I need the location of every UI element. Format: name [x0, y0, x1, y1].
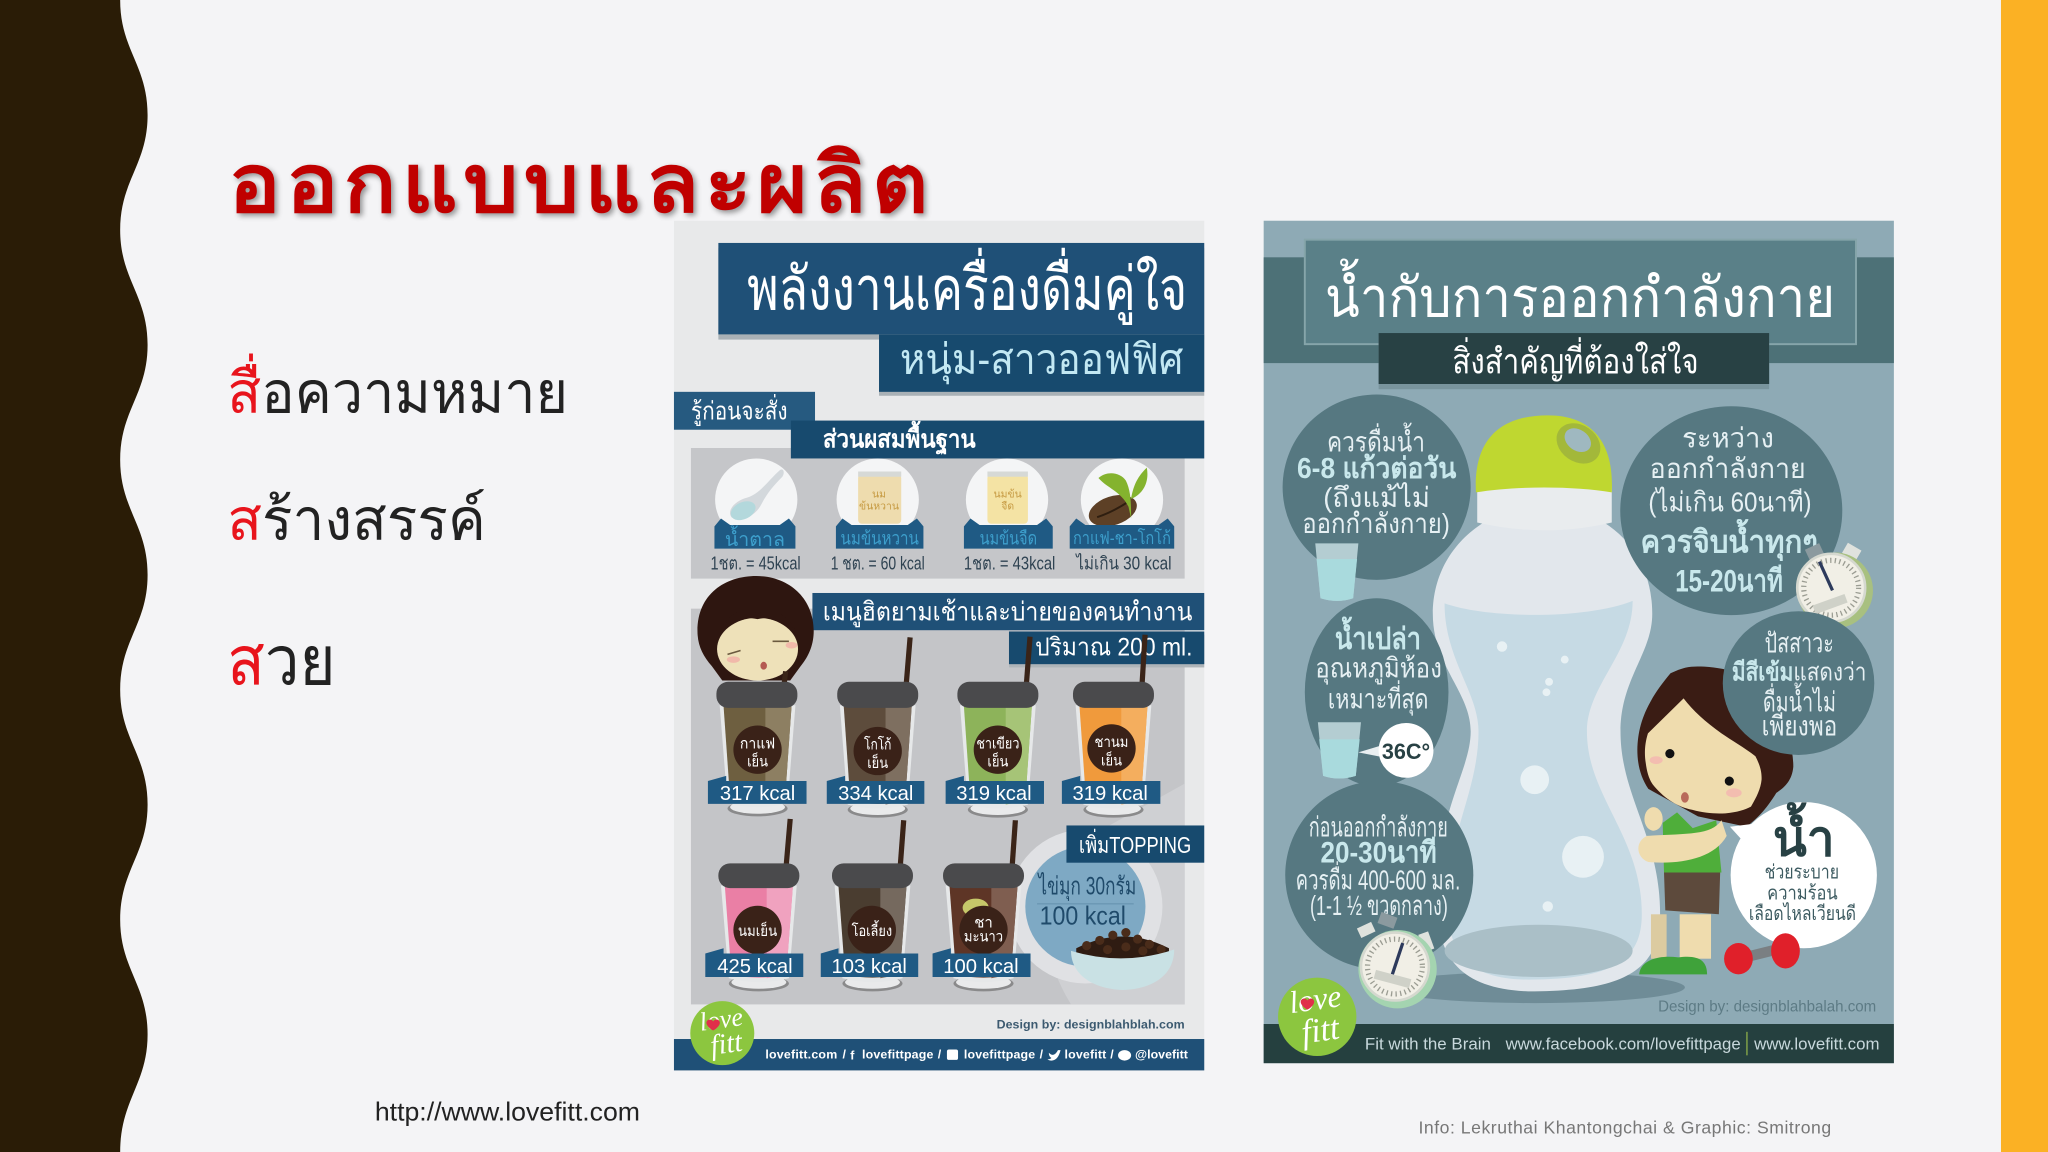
heading ribbon: น้ำกับการออกกำลังกาย [1325, 259, 1835, 329]
logo: lovefitt: fitt [1299, 1009, 1343, 1052]
cup: iced coffee [708, 671, 807, 816]
credit: designer: Design by: designblahblah.com [997, 1017, 1185, 1031]
banner: base ingredients: ส่วนผสมพื้นฐาน [823, 420, 976, 455]
cup: iced black coffee: 103 kcal [832, 956, 907, 978]
ingredient: evaporated milk: นมข้น [994, 489, 1022, 501]
logo: lovefitt: love [1287, 978, 1343, 1020]
callout: water benefits: ช่วยระบาย [1765, 862, 1839, 884]
cup: iced lemon tea: 100 kcal [943, 956, 1019, 978]
cup: iced black coffee: โอเลี้ยง [852, 920, 892, 940]
icon: stopwatch 15 minutes [1797, 543, 1873, 628]
icon: bowl of tapioca pearls [1071, 928, 1174, 990]
cup: iced lemon tea: มะนาว [964, 929, 1003, 946]
footer bar with links: www.facebook.com/lovefittpage [1505, 1034, 1741, 1053]
cup: iced green tea [946, 637, 1044, 818]
callout: water benefits: เลือดไหลเวียนดี [1749, 902, 1856, 925]
footer bar with social links: f [850, 1048, 855, 1062]
panel: popular menu background [691, 609, 1185, 1004]
callout: topping pearl calories [1008, 825, 1204, 990]
cup: iced green tea: เย็น [987, 752, 1008, 771]
bubble: room temperature water [1305, 598, 1448, 786]
banner: add topping [1066, 825, 1204, 863]
subheading banner: หนุ่ม-สาวออฟฟิศ [900, 336, 1184, 385]
footer bar with social links: @lovefitt [1135, 1047, 1188, 1061]
callout: water benefits: น้ำ [1773, 802, 1835, 867]
title: ออกแบบและผลิต [229, 140, 934, 230]
cup: iced milk [705, 819, 803, 991]
icon: stopwatch 30 minutes [1357, 912, 1437, 1008]
bubble: drink 6-8 glasses [1283, 394, 1471, 601]
bottle cap [1476, 415, 1612, 492]
banner: know before ordering [674, 392, 815, 430]
bubble: dark urine: มีสีเข้มแสดงว่า [1732, 658, 1866, 686]
banner: know before ordering: รู้ก่อนจะสั่ง [691, 393, 788, 426]
cup: iced lemon tea [933, 820, 1031, 991]
cup: iced coffee: 317 kcal [720, 783, 795, 805]
callout: topping pearl calories: ไข่มุก 30กรัม [1037, 872, 1136, 902]
logo: lovefitt [1278, 978, 1356, 1056]
ingredient: evaporated milk [964, 458, 1055, 573]
panel: base ingredients background [691, 448, 1185, 579]
bubble: during exercise: 15-20นาที [1675, 564, 1783, 599]
subheading box: สิ่งสำคัญที่ต้องใส่ใจ [1452, 337, 1699, 381]
bubble: during exercise: ควรจิบน้ำทุกๆ [1640, 518, 1818, 561]
footer bar with social links [674, 1039, 1204, 1070]
cup: iced milk tea: เย็น [1101, 750, 1122, 769]
cup: iced cocoa [827, 637, 924, 818]
bubble: dark urine: เพียงพอ [1762, 710, 1837, 741]
cup: iced black coffee [821, 820, 918, 991]
ingredient: sweetened condensed milk: นม [872, 490, 886, 501]
orange right bar [2001, 0, 2048, 1152]
word: create: สร้างสรรค์ [227, 488, 486, 552]
footer bar with social links: lovefitt.com [765, 1047, 837, 1061]
banner: about 200 ml [1009, 632, 1204, 667]
icon: glass with 36C label: 36C° [1382, 739, 1430, 764]
icon: glass with 36C label [1318, 722, 1433, 778]
text block: three s-words [227, 354, 568, 699]
banner: about 200 ml: ปริมาณ 200 ml. [1035, 635, 1192, 662]
bubble: dark urine: ปัสสาวะ [1765, 628, 1834, 659]
cup: iced coffee: กาแฟ [740, 735, 775, 752]
cup: iced milk: 425 kcal [717, 956, 793, 978]
ingredient: evaporated milk: จืด [1001, 499, 1014, 512]
footer bar with social links: lovefitt [1064, 1047, 1106, 1061]
ingredient: evaporated milk: 1ชต. = 43kcal [964, 552, 1055, 573]
bubble: drink 6-8 glasses: (ถึงแม้ไม่ [1323, 482, 1430, 513]
footer bar with social links: / [1040, 1047, 1044, 1061]
credit line: Info: Lekruthai Khantongchai & Graphic: Smitrong [1418, 1118, 1831, 1138]
ingredient: coffee tea cocoa [1070, 458, 1174, 573]
ingredient: sweetened condensed milk: นมข้นหวาน [840, 528, 919, 549]
cup: iced milk: นมเย็น [738, 921, 777, 940]
callout: water benefits [1730, 802, 1877, 948]
logo: lovefitt: love [698, 1002, 745, 1037]
banner: add topping: เพิ่มTOPPING [1079, 828, 1191, 858]
heading banner [718, 243, 1204, 340]
character: sleepy office worker head [697, 576, 814, 680]
bubble: during exercise: ระหว่าง [1682, 422, 1774, 453]
subheading box [1379, 333, 1769, 389]
cup: iced green tea: ชาเขียว [976, 735, 1019, 752]
bubble: before exercise [1285, 781, 1473, 969]
callout: water benefits: ความร้อน [1767, 882, 1838, 904]
bubble: dark urine [1723, 611, 1874, 755]
bottle neck [1477, 486, 1612, 530]
bubble: room temperature water: น้ำเปล่า [1335, 616, 1421, 656]
credit: designer: Design by: designblahbalah.com [1658, 999, 1876, 1016]
footer bar with links [1264, 1024, 1894, 1063]
cup: iced milk tea: 319 kcal [1073, 783, 1148, 805]
banner: popular morning and afternoon menu: เมนูฮิตยามเช้าและบ่ายของคนทำงาน [823, 596, 1193, 627]
bubble: drink 6-8 glasses: ออกกำลังกาย) [1302, 508, 1450, 539]
ingredient: coffee tea cocoa: กาแฟ-ชา-โกโก้ [1073, 528, 1171, 548]
ingredient: sweetened condensed milk: 1 ชต. = 60 kcal [831, 552, 925, 573]
cup: iced cocoa: 334 kcal [838, 783, 913, 805]
heading ribbon [1264, 240, 1894, 363]
word: communicate: สื่อความหมาย [227, 354, 568, 426]
ingredient: sweetened condensed milk [831, 458, 925, 573]
cup: iced cocoa: เย็น [867, 753, 888, 772]
footer bar with links: www.lovefitt.com [1753, 1034, 1880, 1053]
logo: lovefitt: fitt [708, 1026, 745, 1062]
ingredient: evaporated milk: นมข้นจืด [980, 528, 1037, 549]
banner: base ingredients [791, 420, 1204, 458]
icon: red dumbbell [1724, 933, 1800, 974]
footer bar with links: Fit with the Brain [1365, 1035, 1491, 1053]
callout: topping pearl calories: 100 kcal [1040, 901, 1126, 931]
bubble: during exercise: (ไม่เกิน 60นาที) [1648, 487, 1812, 518]
bubble: dark urine: ดื่มน้ำไม่ [1763, 683, 1836, 718]
cup: iced coffee: เย็น [747, 752, 768, 771]
bubble: room temperature water: อุณหภูมิห้อง [1315, 652, 1442, 685]
ingredient: sugar: น้ำตาล [725, 525, 785, 551]
word: beautiful: สวย [227, 624, 336, 699]
footer bar with social links: / [938, 1047, 942, 1061]
footer bar with social links: lovefittpage [862, 1047, 933, 1061]
footer bar with social links: lovefittpage [964, 1047, 1035, 1061]
cup: iced green tea: 319 kcal [956, 783, 1032, 805]
footer bar with social links: / [842, 1047, 846, 1061]
bubble: before exercise: ควรดื่ม 400-600 มล. [1296, 861, 1460, 895]
ingredient: sweetened condensed milk: ข้นหวาน [859, 500, 899, 512]
cup: iced lemon tea: ชา [974, 914, 993, 931]
bubble: drink 6-8 glasses: ควรดื่มน้ำ [1327, 423, 1425, 458]
icon: glass of water [1315, 543, 1358, 601]
footer bar with social links: / [1110, 1047, 1114, 1061]
bubble: before exercise: ก่อนออกกำลังกาย [1309, 812, 1448, 843]
bubble: drink 6-8 glasses: 6-8 แก้วต่อวัน [1297, 453, 1457, 485]
wavy dark left border [0, 0, 148, 1152]
cup: iced cocoa: โกโก้ [864, 736, 891, 754]
heading banner: พลังงานเครื่องดื่มคู่ใจ [747, 248, 1187, 326]
cup: iced milk tea [1062, 635, 1160, 818]
source url: http://www.lovefitt.com [375, 1097, 640, 1127]
bubble: during exercise: ออกกำลังกาย [1650, 453, 1806, 484]
bubble: room temperature water: เหมาะที่สุด [1328, 680, 1429, 716]
logo: lovefitt [690, 1001, 754, 1065]
panel: water and exercise infographic [1264, 221, 1894, 1063]
cup: iced milk tea: ชานม [1095, 734, 1128, 751]
bubble: before exercise: (1-1 ½ ขวดกลาง) [1310, 890, 1448, 921]
bubble: during exercise [1620, 406, 1842, 615]
ingredient: sugar: 1ชต. = 45kcal [711, 552, 801, 573]
ingredient: sugar [711, 458, 801, 573]
bubble: before exercise: 20-30นาที [1320, 837, 1437, 870]
character: girl hugging bottle [1637, 666, 1793, 974]
panel: energy drinks infographic [674, 221, 1204, 1071]
ingredient: coffee tea cocoa: ไม่เกิน 30 kcal [1075, 552, 1172, 573]
bottle [1384, 415, 1685, 1003]
